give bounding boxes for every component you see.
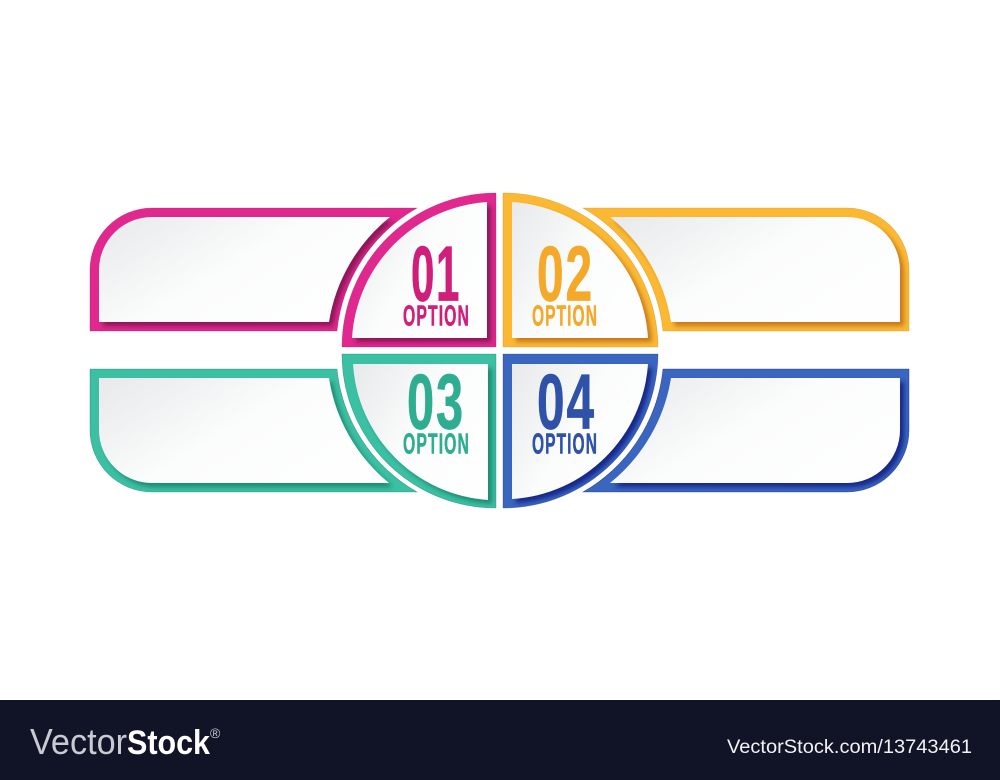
quarter circle: blue — [503, 354, 658, 508]
number 02: 02 — [537, 230, 594, 318]
banner: magenta text box — [90, 208, 417, 331]
label: option: OPTION — [403, 428, 470, 460]
banner: yellow text box — [583, 208, 909, 331]
logo: VectorStock — [30, 721, 221, 762]
label: option: OPTION — [532, 300, 598, 332]
number 03: 03 — [407, 358, 465, 446]
logo: VectorStock: ® — [210, 725, 221, 741]
footer bar — [0, 700, 1000, 780]
panel: option 02 (yellow) — [503, 193, 909, 347]
panel: option 04 (blue) — [503, 354, 909, 508]
quarter circle: teal — [342, 354, 496, 508]
banner: teal text box — [90, 369, 417, 492]
panel: option 01 (magenta) — [90, 193, 496, 347]
panel: option 03 (teal) — [90, 354, 496, 508]
number 01: 01 — [411, 230, 461, 318]
label: option: OPTION — [403, 300, 470, 332]
quarter circle: yellow — [503, 193, 658, 347]
banner: blue text box — [583, 369, 909, 492]
logo: VectorStock: Stock — [127, 724, 210, 762]
number 04: 04 — [537, 358, 596, 446]
image id url: VectorStock.com/13743461 — [727, 737, 972, 758]
logo: VectorStock: Vector — [30, 721, 127, 762]
quarter circle: magenta — [342, 193, 496, 347]
label: option: OPTION — [532, 428, 598, 460]
